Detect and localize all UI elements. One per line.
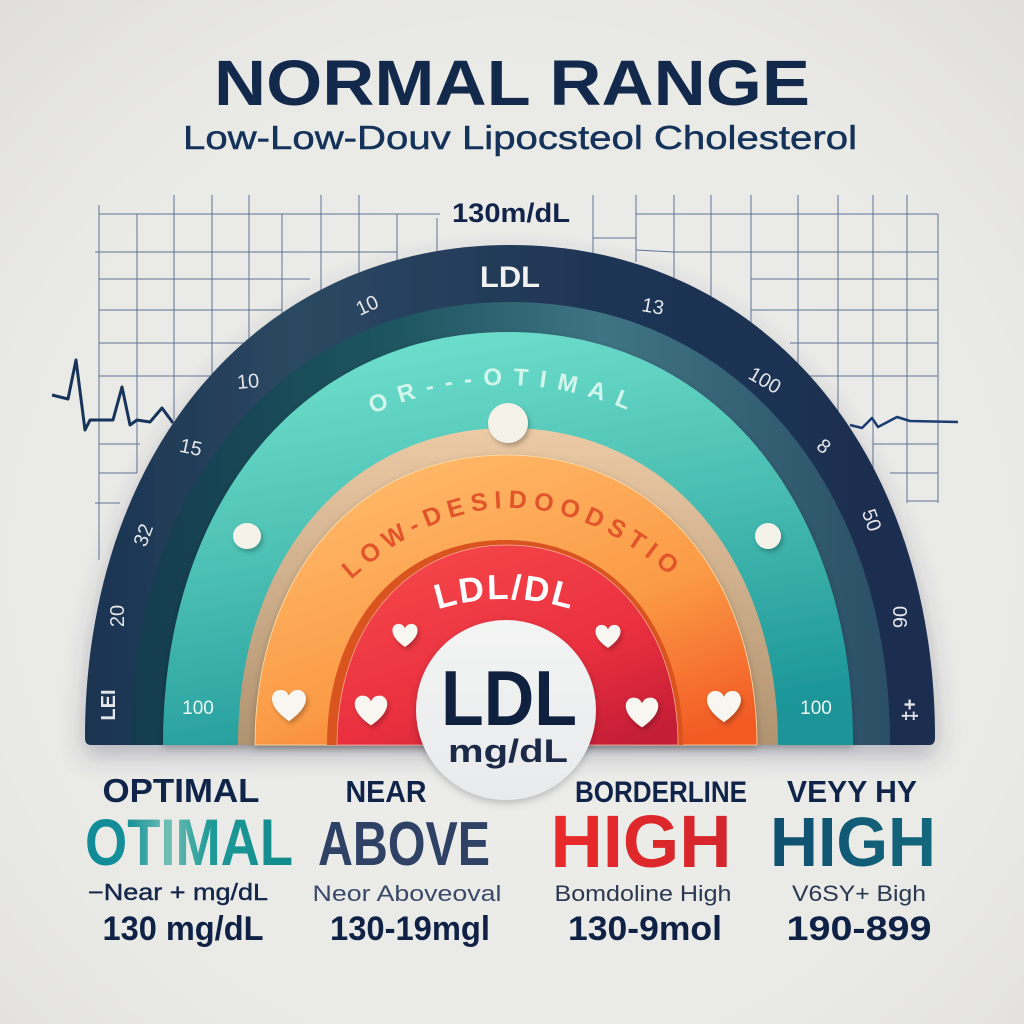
description: Neor Aboveoval — [312, 881, 502, 906]
scale numbers: +‡ — [898, 699, 920, 721]
scale numbers: 10 — [236, 370, 260, 394]
column: borderline high — [550, 776, 747, 948]
band: teal optimal — [163, 332, 853, 745]
category: ABOVE — [318, 810, 490, 879]
marker: dot left — [233, 523, 261, 549]
title: NORMAL RANGE — [214, 47, 810, 119]
heading: OPTIMAL — [102, 772, 260, 809]
column: near above — [312, 774, 502, 948]
band: orange — [255, 455, 757, 745]
hearts — [272, 624, 741, 727]
band: red — [337, 545, 678, 745]
category: OTIMAL — [85, 805, 293, 879]
subtitle: Low-Low-Douv Lipocsteol Cholesterol — [183, 119, 857, 156]
band label: low desirable: LOW-DESIDOODSTIO — [341, 490, 677, 578]
column: optimal — [85, 772, 293, 948]
band: navy outer — [85, 245, 935, 745]
heading: BORDERLINE — [575, 776, 747, 809]
value: 130-19mgl — [330, 910, 490, 948]
ecg line right — [850, 417, 958, 428]
value: 190-899 — [786, 910, 932, 948]
scale numbers: 100 — [800, 698, 832, 719]
scale numbers: 8 — [812, 435, 835, 459]
band label: LDL/DL: LDL/DL — [434, 574, 570, 609]
background grid — [95, 195, 938, 560]
marker: pill top — [488, 403, 528, 443]
heading: VEYY HY — [787, 774, 917, 809]
band label: LDL: LDL — [480, 261, 540, 294]
scale numbers: 20 — [107, 605, 129, 627]
value: 130-9mol — [568, 910, 722, 948]
description: V6SY+ Bigh — [792, 881, 926, 906]
band: dark orange rim — [327, 540, 683, 745]
band: dark teal — [130, 302, 890, 745]
description: −Near + mg/dL — [88, 879, 268, 905]
scale numbers: 06 — [888, 606, 910, 628]
scale numbers: 13 — [640, 294, 666, 320]
marker: dot right — [755, 523, 781, 549]
band: tan — [238, 428, 778, 745]
category: HIGH — [550, 800, 732, 883]
badge text: mg/dL: mg/dL — [448, 733, 568, 769]
column: very high — [770, 774, 936, 948]
ecg line left — [52, 360, 173, 430]
scale numbers: 100 — [182, 698, 214, 719]
badge text: LDL: LDL — [441, 654, 577, 742]
gauge — [72, 242, 948, 806]
heading: NEAR — [346, 774, 426, 809]
scale numbers: 15 — [178, 435, 204, 461]
scale numbers: 10 — [353, 291, 382, 321]
scale numbers: LEI — [98, 689, 120, 721]
value: 130 mg/dL — [102, 910, 264, 948]
scale numbers: 100 — [745, 363, 784, 399]
center badge — [416, 620, 596, 800]
scale numbers — [98, 291, 920, 721]
band label: optimal: OR---OTIMAL — [370, 368, 628, 412]
category: HIGH — [770, 803, 936, 881]
scale numbers: 50 — [857, 506, 885, 535]
chart label: 130 mg/dL: 130m/dL — [452, 198, 570, 228]
scale numbers: 32 — [130, 521, 158, 550]
description: Bomdoline High — [554, 881, 732, 906]
